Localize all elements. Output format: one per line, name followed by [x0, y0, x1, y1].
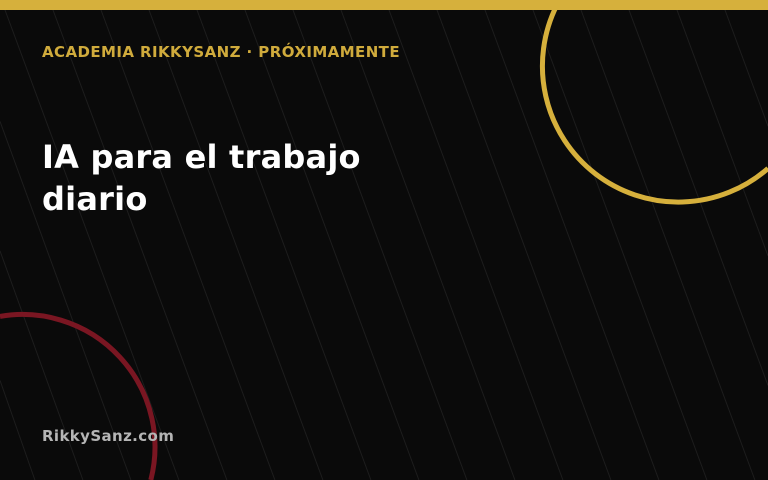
title: diario — [42, 180, 148, 218]
eyebrow label: ACADEMIA RIKKYSANZ · PRÓXIMAMENTE — [42, 43, 400, 61]
decorative gold ring — [542, 5, 768, 202]
footer website: RikkySanz.com — [42, 427, 174, 445]
title — [42, 138, 361, 218]
top gold bar — [0, 0, 768, 10]
title: IA para el trabajo — [42, 138, 361, 176]
decorative red ring — [0, 314, 155, 480]
